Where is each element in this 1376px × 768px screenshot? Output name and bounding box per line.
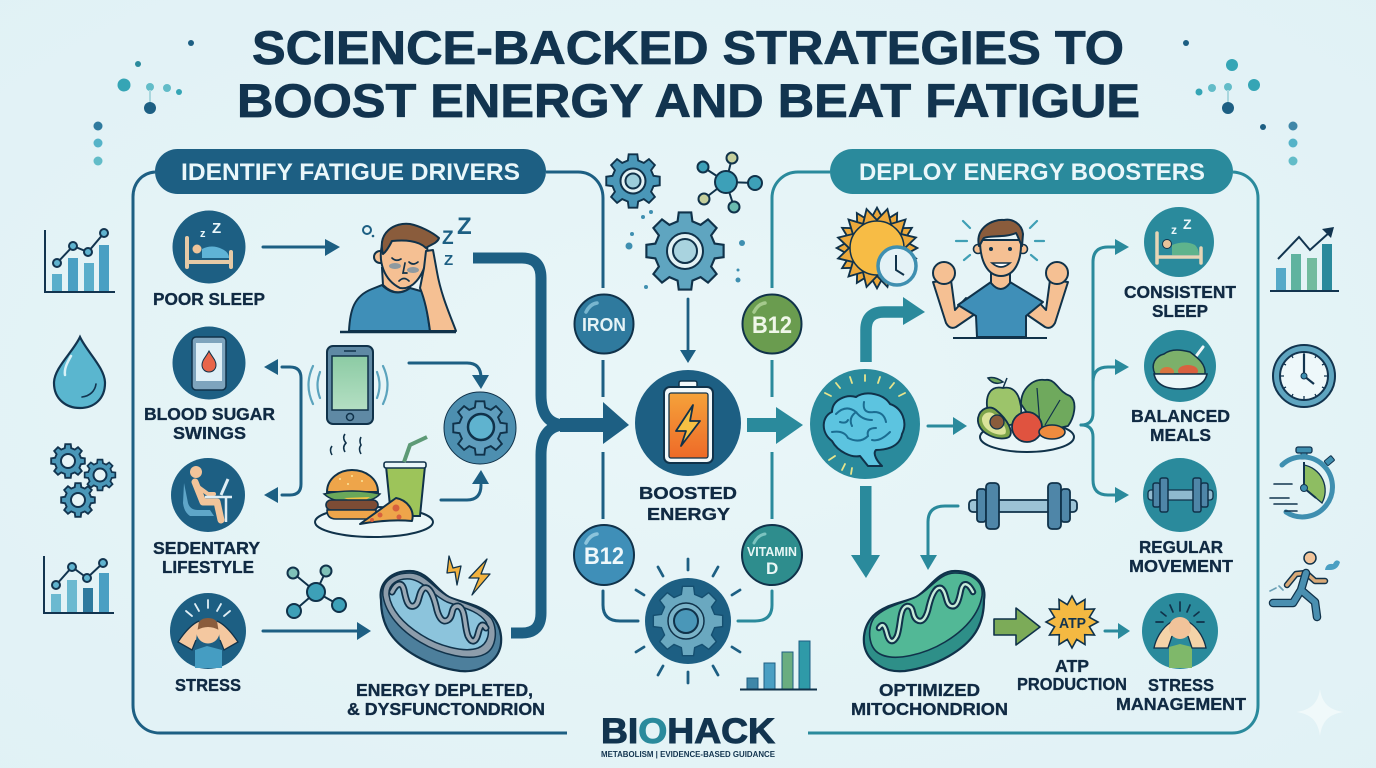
arrow: poor sleep to tired person (263, 239, 340, 256)
nutrient: b12 top (742, 294, 802, 354)
icon: water drop (54, 337, 105, 408)
icon: atp burst (1046, 596, 1098, 648)
booster: balanced meals: MEALS (1150, 425, 1211, 445)
nutrient: iron (574, 294, 634, 354)
arrow: brain to food (928, 417, 967, 435)
booster: consistent sleep: Z (1183, 216, 1192, 232)
label: energy depleted (347, 680, 545, 719)
label: atp production: ATP (1055, 656, 1089, 676)
heading: identify fatigue drivers (155, 149, 546, 194)
label: energy depleted: & DYSFUNCTONDRION (347, 699, 545, 719)
label: optimized mitochondrion: OPTIMIZED (879, 680, 980, 700)
icon: tired person (340, 213, 472, 332)
driver: poor sleep: Z (212, 220, 221, 237)
heading: identify fatigue drivers: IDENTIFY FATIGUE DRIVERS (181, 159, 520, 186)
decorative sparkle (1296, 689, 1344, 736)
icon: wall clock (1273, 345, 1335, 407)
icon: healthy food plate (978, 378, 1074, 452)
decorative dots right (1183, 40, 1298, 166)
booster: regular movement (1129, 458, 1233, 576)
title (237, 21, 1140, 127)
panel: deploy energy boosters outline (772, 172, 1258, 733)
label: energy depleted: ENERGY DEPLETED, (356, 680, 533, 700)
battery: boosted energy: ENERGY (647, 504, 730, 524)
driver: poor sleep: z (200, 228, 206, 240)
booster: regular movement: REGULAR (1139, 537, 1223, 557)
icon: tired person: Z (444, 252, 453, 269)
driver: blood sugar swings (144, 326, 275, 443)
driver: stress: STRESS (175, 675, 241, 695)
icon: tired person: Z (457, 213, 472, 240)
logo: biohack: METABOLISM | EVIDENCE-BASED GUIDANCE (601, 749, 775, 759)
icon: brain in circle (810, 369, 920, 479)
logo: biohack: BIOHACK (601, 712, 775, 751)
driver: blood sugar swings: SWINGS (173, 423, 246, 443)
heading: deploy energy boosters (830, 149, 1233, 194)
icon: lower gear with rays (636, 559, 740, 683)
title: SCIENCE-BACKED STRATEGIES TO (252, 21, 1124, 74)
icon: rising chart right (1270, 227, 1339, 291)
driver: poor sleep: POOR SLEEP (153, 289, 265, 309)
booster: stress management: MANAGEMENT (1116, 694, 1246, 714)
icon: three gears (51, 444, 115, 517)
icon: runner (1270, 552, 1340, 617)
booster: balanced meals (1131, 330, 1230, 445)
driver: sedentary lifestyle (153, 458, 260, 577)
connectors to lower gear (603, 591, 772, 621)
booster: stress management (1116, 593, 1246, 714)
heading: deploy energy boosters: DEPLOY ENERGY BOOSTERS (859, 159, 1205, 186)
decorative dots left (94, 40, 194, 166)
icon: smartphone (308, 346, 388, 424)
icon: small gear top (606, 154, 660, 208)
label: optimized mitochondrion: MITOCHONDRION (851, 699, 1008, 719)
arrow: thick merging arrow to battery (473, 258, 629, 633)
icon: lightning bolts (447, 556, 490, 595)
label: atp production: PRODUCTION (1017, 674, 1127, 694)
booster: consistent sleep: CONSISTENT (1124, 282, 1236, 302)
arrow: gear to battery (680, 299, 696, 363)
icon: depleted mitochondrion (381, 571, 501, 671)
icon: dumbbell (969, 483, 1077, 529)
driver: stress (170, 593, 246, 695)
booster: balanced meals: BALANCED (1131, 406, 1230, 426)
arrow: brain to optimized mitochondrion (851, 486, 880, 578)
arrow: mitochondrion to atp (994, 608, 1040, 645)
driver: sedentary lifestyle: SEDENTARY (153, 538, 260, 558)
arrow: food branching to boosters (1081, 239, 1129, 503)
icon: small bar chart center (740, 641, 817, 690)
icon: optimized mitochondrion (864, 571, 984, 671)
booster: stress management: STRESS (1148, 675, 1214, 695)
icon: line and bar chart left bottom (44, 556, 114, 613)
driver: sedentary lifestyle: LIFESTYLE (162, 557, 254, 577)
booster: consistent sleep (1124, 207, 1236, 321)
nutrient: iron: IRON (582, 315, 626, 335)
nutrient: vitamin d: D (766, 559, 778, 578)
icon: fast food plate (315, 434, 433, 537)
arrow: stress to mitochondrion (263, 622, 371, 640)
icon: large gear top (626, 210, 745, 290)
nutrient: vitamin d: VITAMIN (747, 544, 797, 559)
driver: blood sugar swings: BLOOD SUGAR (144, 404, 275, 424)
arrow: phone to blood sugar and sedentary (264, 359, 301, 503)
icon: sun and clock (828, 199, 926, 297)
panel: identify fatigue drivers outline (133, 172, 603, 733)
booster: regular movement: MOVEMENT (1129, 556, 1233, 576)
arrow: battery to brain (747, 407, 803, 444)
nutrient: vitamin d (742, 525, 802, 585)
icon: line and bar chart left top (45, 229, 115, 292)
icon: molecule left (287, 566, 346, 618)
nutrient: b12 top: B12 (752, 312, 792, 339)
nutrient: b12 bottom (574, 525, 634, 585)
battery: boosted energy: BOOSTED (639, 483, 737, 503)
label: optimized mitochondrion (851, 680, 1008, 719)
icon: stopwatch with speed lines (1270, 447, 1335, 517)
arrow: atp to stress management (1105, 623, 1130, 639)
driver: poor sleep (153, 210, 265, 309)
icon: energized person (933, 220, 1068, 338)
arrow: food to gear (441, 470, 489, 500)
icon: gear in circle left (444, 392, 516, 464)
nutrient: b12 bottom: B12 (584, 543, 624, 570)
icon: molecule top (698, 152, 762, 212)
icon: tired person: Z (442, 228, 454, 249)
booster: consistent sleep: SLEEP (1152, 301, 1208, 321)
booster: consistent sleep: z (1171, 223, 1177, 237)
icon: atp burst: ATP (1059, 615, 1086, 632)
arrow: phone to gear (409, 363, 489, 389)
battery: boosted energy (635, 370, 741, 524)
arrow: brain to energized person (866, 297, 925, 362)
arrow: dumbbell to mitochondrion (920, 506, 958, 570)
title: BOOST ENERGY AND BEAT FATIGUE (237, 74, 1140, 127)
label: atp production (1017, 656, 1127, 694)
